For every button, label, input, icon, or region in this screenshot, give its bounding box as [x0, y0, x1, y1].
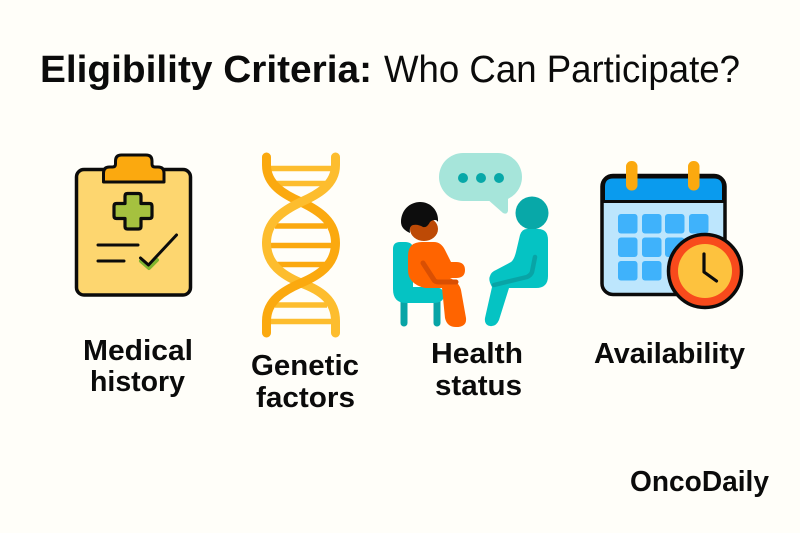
- label: genetic factors: factors: [256, 382, 355, 414]
- strand B lower: [266, 243, 336, 333]
- left person face: [410, 217, 438, 241]
- calendar header: [604, 177, 724, 202]
- icon: calendar with clock: [602, 161, 742, 308]
- icon: DNA helix: [266, 157, 336, 333]
- label: medical history: history: [90, 366, 185, 398]
- text lines: [98, 245, 138, 261]
- label: genetic factors: Genetic: [251, 350, 359, 382]
- right person arm shadow: [494, 257, 535, 285]
- check mark: [140, 235, 176, 268]
- label: health status: [431, 338, 523, 402]
- label: health status: Health: [431, 338, 523, 370]
- right person head: [516, 196, 548, 230]
- calendar rings: [626, 161, 700, 190]
- label: medical history: Medical: [83, 335, 193, 367]
- strand A: [266, 157, 336, 333]
- title: [40, 49, 740, 91]
- bubble dots: [458, 173, 504, 183]
- clock: [668, 234, 742, 308]
- strand B upper: [266, 157, 336, 243]
- icon: medical clipboard: [76, 155, 190, 295]
- title: Eligibility Criteria:: [40, 49, 372, 91]
- speech bubble: [439, 153, 522, 214]
- left person body: [408, 242, 466, 327]
- clipboard clip: [104, 155, 164, 182]
- calendar date cells: [618, 214, 708, 280]
- label: genetic factors: [251, 350, 359, 414]
- left person arm shadow: [423, 263, 456, 282]
- brand logo: OncoDaily: OncoDaily: [630, 466, 769, 498]
- right person body: [485, 229, 548, 326]
- label: medical history: [83, 335, 193, 398]
- label: health status: status: [435, 370, 522, 402]
- medical cross: [114, 194, 152, 229]
- icon: two people talking: [393, 153, 548, 327]
- chair: [393, 242, 444, 323]
- left person hair: [401, 202, 438, 233]
- rungs: [270, 168, 332, 322]
- title: Who Can Participate?: [384, 49, 740, 91]
- label: availability: Availability: [594, 338, 745, 370]
